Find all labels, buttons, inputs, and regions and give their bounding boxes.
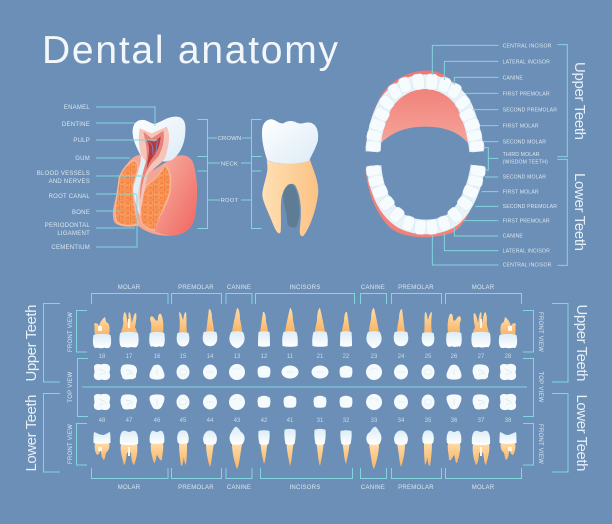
upper tooth numbers: 13 (234, 354, 241, 360)
tooth chart bottom brackets: INCISORS (289, 485, 321, 491)
left side headings and brackets: Upper Teeth (23, 304, 40, 382)
tooth name labels: SECOND PREMOLAR (503, 204, 557, 210)
right side headings and brackets: Lower Teeth (573, 394, 590, 472)
tooth name labels: SECOND PREMOLAR (503, 107, 557, 113)
upper and lower brackets (557, 45, 567, 265)
cross-section labels: ROOT CANAL (49, 194, 90, 200)
tooth name labels: CANINE (503, 75, 523, 81)
left side headings and brackets (23, 304, 88, 472)
bracket: crown, neck, root: CROWN (218, 136, 241, 142)
tooth name labels: CANINE (503, 234, 523, 240)
lower tooth numbers: 41 (287, 418, 294, 424)
lower tooth numbers: 35 (425, 418, 432, 424)
upper tooth numbers: 27 (478, 354, 485, 360)
tooth name labels: FIRST PREMOLAR (503, 91, 550, 97)
tooth chart bottom brackets: MOLAR (118, 485, 141, 491)
jaws illustration (365, 43, 567, 269)
tooth name labels: SECOND MOLAR (503, 175, 546, 181)
upper jaw (365, 71, 484, 152)
tooth chart top brackets: CANINE (227, 285, 251, 291)
left side headings and brackets: TOP VIEW (68, 371, 74, 403)
tooth chart bottom brackets: CANINE (227, 485, 251, 491)
right side headings and brackets (523, 304, 590, 472)
tooth chart bottom brackets: MOLAR (472, 485, 495, 491)
tooth name labels: CENTRAL INCISOR (503, 263, 552, 269)
cross-section labels: GUM (75, 156, 90, 162)
labelled tooth cross-section panel (37, 105, 197, 251)
cross-section labels: AND NERVES (49, 179, 90, 185)
bracket: crown, neck, root (198, 120, 262, 228)
bracket: crown, neck, root: ROOT (221, 198, 239, 204)
cross-section illustration (113, 117, 197, 236)
right side headings and brackets: FRONT VIEW (537, 312, 543, 352)
cross-section labels: BONE (72, 210, 90, 216)
tooth chart top brackets: PREMOLAR (178, 285, 214, 291)
lower teeth front view (94, 427, 516, 469)
tooth chart bottom brackets: PREMOLAR (178, 485, 214, 491)
upper tooth numbers: 21 (317, 354, 324, 360)
upper tooth numbers: 16 (154, 354, 161, 360)
upper tooth numbers: 12 (261, 354, 268, 360)
upper tooth numbers: 23 (371, 354, 378, 360)
right side headings and brackets: TOP VIEW (537, 371, 543, 403)
tooth chart top brackets: INCISORS (289, 285, 321, 291)
cross-section labels: BLOOD VESSELS (37, 171, 90, 177)
right side headings and brackets: FRONT VIEW (537, 424, 543, 464)
cross-section labels: DENTINE (62, 122, 90, 128)
title: Dental anatomy (42, 29, 338, 72)
lower tooth numbers: 37 (478, 418, 485, 424)
tooth name labels: FIRST MOLAR (503, 123, 539, 129)
tooth name labels: THIRD MOLAR (503, 152, 540, 158)
lower tooth numbers: 34 (398, 418, 405, 424)
lower tooth numbers: 42 (261, 418, 268, 424)
upper tooth numbers: 15 (180, 354, 187, 360)
heading: lower teeth right: Lower Teeth (571, 173, 588, 251)
lower tooth numbers: 48 (99, 418, 106, 424)
upper tooth numbers: 24 (398, 354, 405, 360)
bracket: crown, neck, root: NECK (221, 162, 238, 168)
heading: upper teeth right: Upper Teeth (571, 62, 588, 140)
tooth chart bottom brackets: CANINE (361, 485, 385, 491)
lower tooth numbers: 36 (451, 418, 458, 424)
tooth name labels: SECOND MOLAR (503, 139, 546, 145)
cross-section labels: CEMENTIUM (51, 245, 90, 251)
tooth chart top brackets: MOLAR (472, 285, 495, 291)
lower tooth numbers: 31 (317, 418, 324, 424)
lower jaw (365, 165, 486, 237)
left side headings and brackets: Lower Teeth (23, 394, 40, 472)
left side headings and brackets: FRONT VIEW (68, 312, 74, 352)
cross-section labels: LIGAMENT (57, 231, 90, 237)
upper tooth numbers: 18 (99, 354, 106, 360)
lower tooth numbers: 46 (154, 418, 161, 424)
tooth name labels: (WISDOM TEETH) (503, 159, 548, 165)
upper tooth numbers (99, 354, 512, 360)
whole molar illustration (262, 119, 318, 236)
tooth name labels (503, 43, 557, 269)
lower teeth top view (94, 394, 516, 410)
lower tooth numbers (99, 418, 512, 424)
tooth chart bottom brackets (92, 468, 522, 491)
left side headings and brackets: FRONT VIEW (68, 424, 74, 464)
tooth name labels: LATERAL INCISOR (503, 59, 550, 65)
jaw leader lines (432, 45, 498, 265)
tooth name labels: CENTRAL INCISOR (503, 43, 552, 49)
tooth name labels: LATERAL INCISOR (503, 248, 550, 254)
tooth chart top brackets: PREMOLAR (398, 285, 434, 291)
upper tooth numbers: 11 (287, 354, 294, 360)
tooth name labels: FIRST MOLAR (503, 189, 539, 195)
tooth chart top brackets (92, 285, 522, 304)
cross-section leader lines (96, 107, 157, 247)
lower tooth numbers: 33 (371, 418, 378, 424)
upper tooth numbers: 26 (451, 354, 458, 360)
upper teeth front view (93, 308, 517, 348)
right side headings and brackets: Upper Teeth (573, 304, 590, 382)
upper tooth numbers: 14 (207, 354, 214, 360)
lower tooth numbers: 45 (180, 418, 187, 424)
tooth chart bottom brackets: PREMOLAR (398, 485, 434, 491)
upper teeth top view (94, 364, 516, 380)
lower tooth numbers: 43 (234, 418, 241, 424)
upper tooth numbers: 22 (343, 354, 350, 360)
cross-section labels: PULP (73, 138, 90, 144)
lower tooth numbers: 44 (207, 418, 214, 424)
cross-section labels: ENAMEL (64, 105, 90, 111)
horizontal divider (82, 386, 527, 388)
upper tooth numbers: 28 (505, 354, 512, 360)
upper tooth numbers: 17 (126, 354, 133, 360)
upper tooth numbers: 25 (425, 354, 432, 360)
tooth name labels: FIRST PREMOLAR (503, 219, 550, 225)
lower tooth numbers: 32 (343, 418, 350, 424)
cross-section labels: PERIODONTAL (45, 223, 90, 229)
lower tooth numbers: 47 (126, 418, 133, 424)
cross-section labels (37, 105, 90, 251)
tooth chart top brackets: MOLAR (118, 285, 141, 291)
tooth chart top brackets: CANINE (361, 285, 385, 291)
lower tooth numbers: 38 (505, 418, 512, 424)
